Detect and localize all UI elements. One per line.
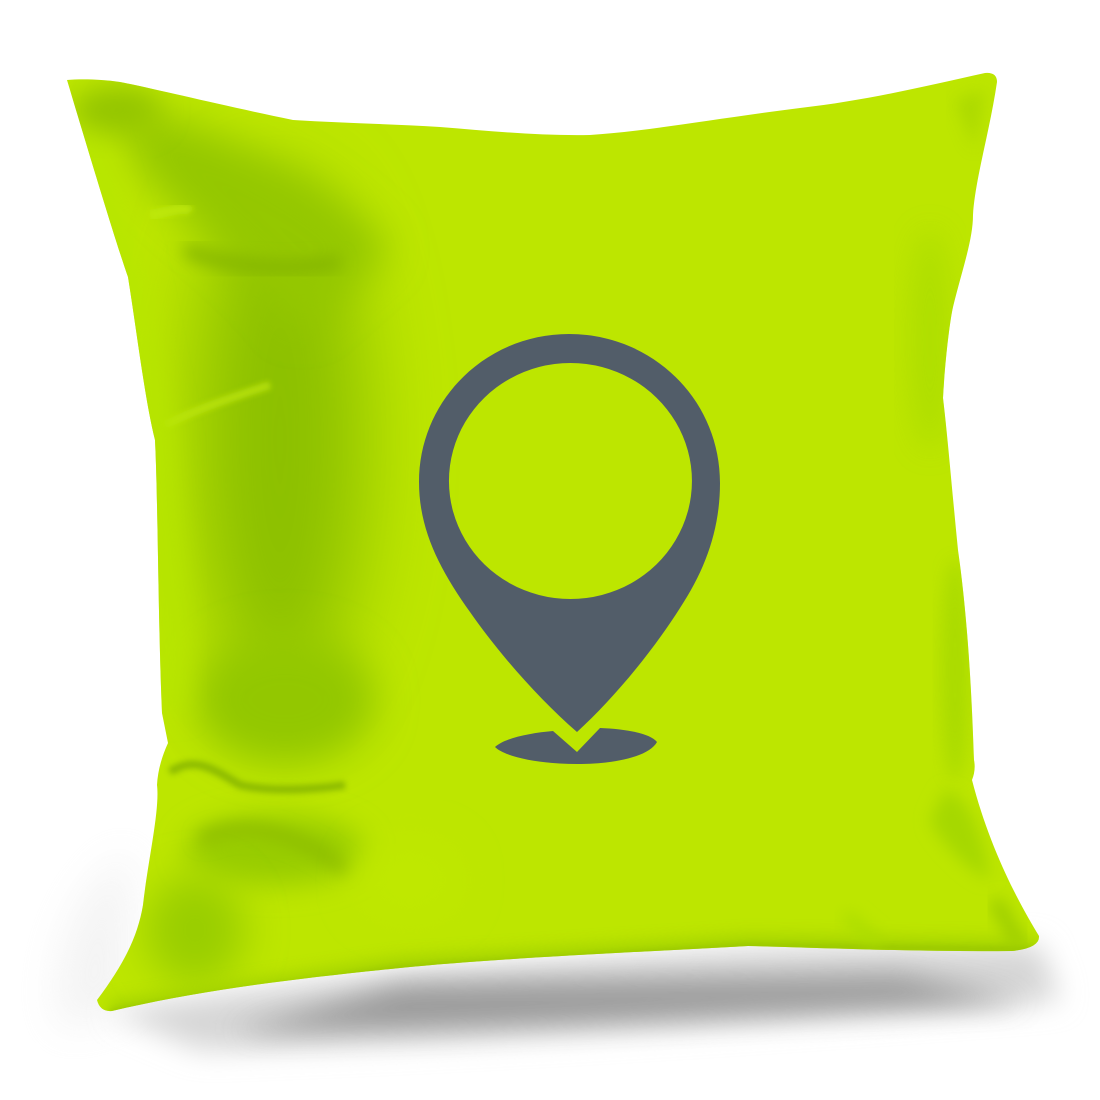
icon: map pin bbox=[419, 334, 720, 764]
fabric shading bbox=[70, 88, 1040, 1012]
pin base shadow bbox=[495, 728, 657, 764]
pillow body bbox=[67, 73, 1040, 1012]
right edge shading bbox=[910, 230, 950, 450]
floor shadow bbox=[57, 850, 1060, 1050]
bright left edge bbox=[85, 130, 172, 710]
bottom band bbox=[110, 946, 1040, 1012]
bottom right corner folds bbox=[930, 790, 990, 880]
wrinkles bbox=[185, 250, 340, 267]
pin body bbox=[419, 334, 720, 732]
